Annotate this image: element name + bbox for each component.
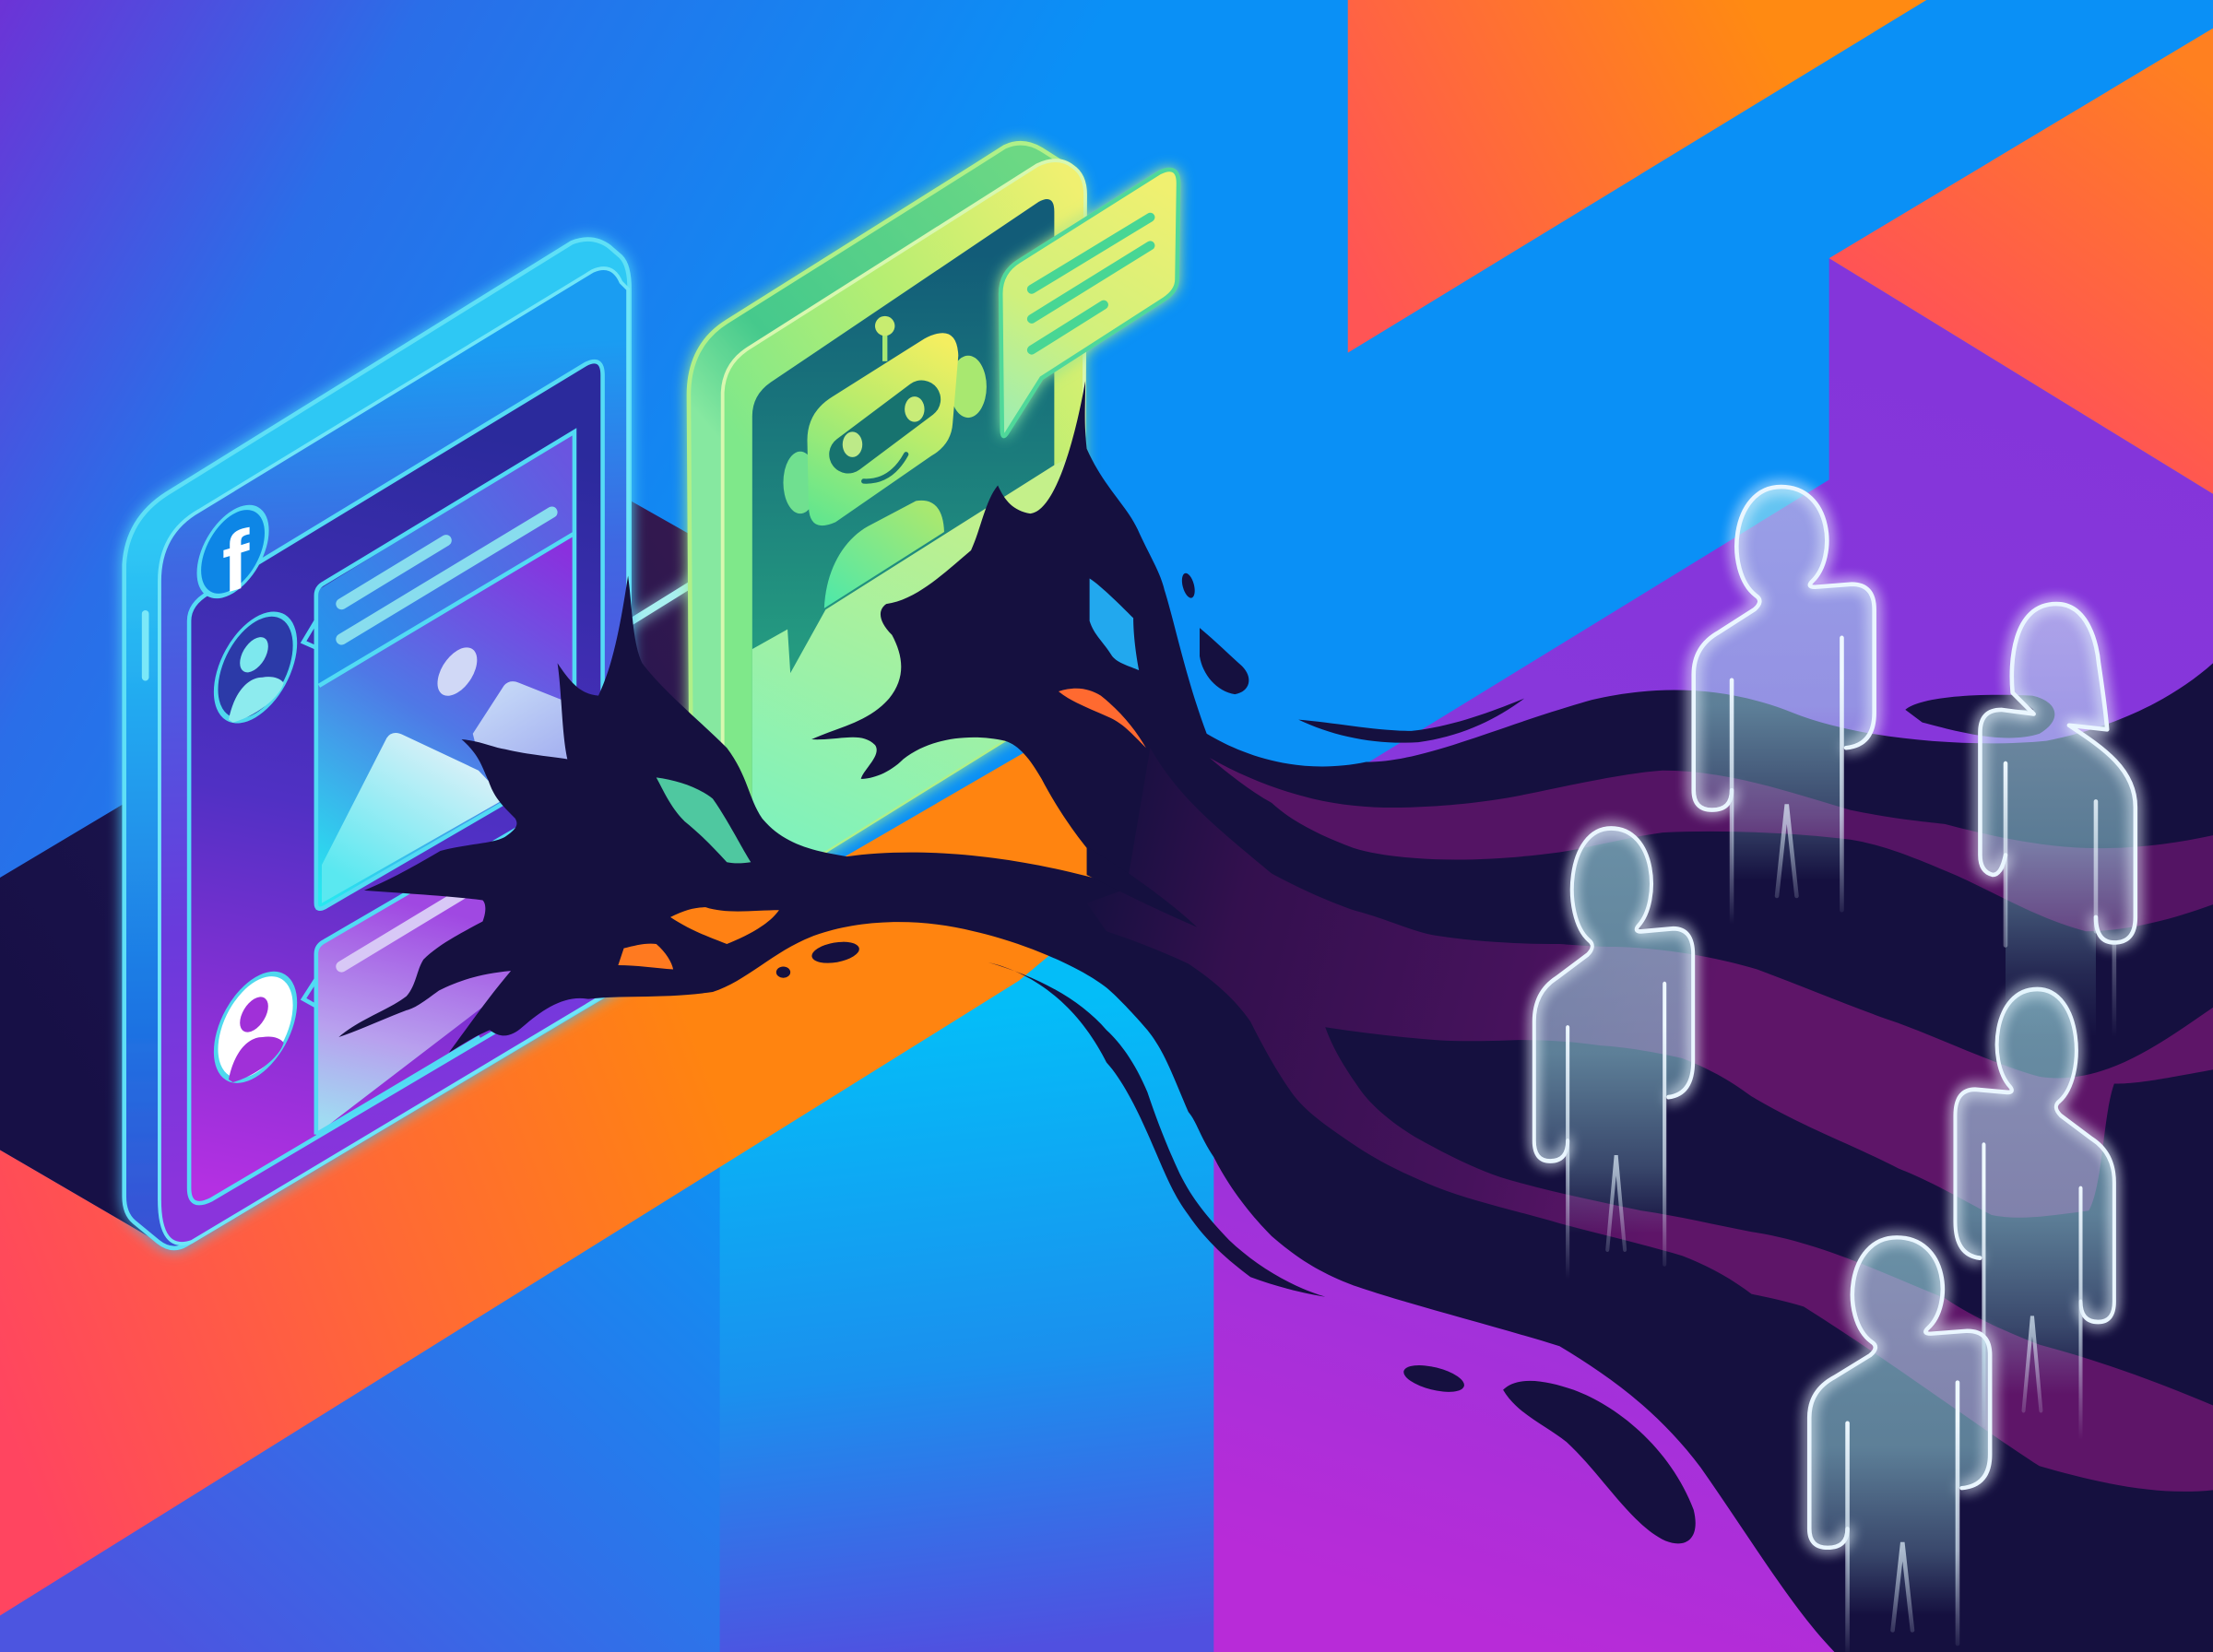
social icon: Facebook badge: f bbox=[222, 513, 250, 612]
chatbot screen light bbox=[752, 452, 1083, 858]
ink drip: small bbox=[1179, 572, 1197, 599]
robot eyes bbox=[843, 431, 862, 457]
ink spots on orange bbox=[776, 938, 861, 978]
side button bbox=[143, 614, 148, 678]
robot visor bbox=[848, 399, 921, 454]
ink ribbon: upper purple bbox=[1210, 758, 2213, 931]
robot ears bbox=[783, 452, 817, 513]
ink hole: cyan bbox=[1090, 579, 1139, 670]
image mountain: far bbox=[473, 681, 572, 762]
ink flood: main mass and river bbox=[338, 381, 2213, 1652]
ink hole: orange tongue bbox=[670, 907, 779, 944]
person: right lower figure bbox=[1955, 989, 2114, 1440]
dark isometric band behind phones bbox=[0, 501, 705, 1249]
person: left figure bbox=[1534, 828, 1693, 1279]
ink drip: large bbox=[1200, 628, 1249, 694]
ink drop: lower left oval bbox=[1401, 1360, 1467, 1397]
background: top orange parallelogram bbox=[1348, 0, 1926, 353]
background: purple right panel bbox=[1213, 258, 2213, 1652]
chatbot phone side bbox=[689, 143, 1083, 867]
chat bubble bbox=[1000, 170, 1178, 436]
social icon: Facebook badge bbox=[199, 492, 266, 612]
post image bbox=[316, 534, 574, 910]
background: lower-left blue panel bbox=[0, 987, 721, 1652]
ink drop: large curved bbox=[1503, 1381, 1696, 1543]
robot head bbox=[808, 333, 958, 525]
phone screen bbox=[189, 361, 603, 1203]
image sun bbox=[437, 639, 477, 704]
robot bbox=[783, 316, 987, 608]
background: right orange wedge bbox=[1829, 29, 2213, 494]
background: central cyan column bbox=[720, 903, 1215, 1652]
robot antenna bbox=[883, 327, 886, 361]
chatbot screen dark bbox=[752, 199, 1054, 846]
chatbot phone front bbox=[723, 160, 1085, 867]
ink hole: phone seen through bbox=[657, 777, 751, 863]
image mountain: near bbox=[322, 733, 505, 903]
ink hole: orange right bbox=[1059, 689, 1146, 748]
ink strand along river edge bbox=[988, 962, 1325, 1297]
bubble text lines bbox=[1032, 218, 1150, 350]
ink hole: small orange bbox=[618, 944, 673, 970]
avatar: top user bbox=[216, 596, 295, 738]
orange isometric band bbox=[0, 741, 1129, 1616]
phone front edge bbox=[160, 268, 628, 1244]
person: woman on the right bbox=[1980, 604, 2136, 1037]
robot smile bbox=[864, 454, 906, 481]
person: top figure bbox=[1694, 487, 1875, 925]
ink ribbon: forked middle and lower purple bbox=[1087, 748, 2213, 1492]
phone: AI chatbot bbox=[689, 143, 1085, 867]
robot body bbox=[824, 501, 944, 608]
connector beam between phones bbox=[628, 572, 710, 624]
post card: lower post bbox=[303, 797, 582, 1135]
post text lines bbox=[341, 513, 551, 639]
phone body bbox=[124, 240, 630, 1248]
post card: top post bbox=[303, 431, 574, 910]
ink wisp inside purple bbox=[1087, 846, 1197, 927]
avatar: lower user bbox=[216, 956, 295, 1099]
person: bottom figure bbox=[1809, 1237, 1990, 1652]
ink strand: upper wisp bbox=[1298, 699, 1524, 743]
ink spot behind woman bbox=[1905, 695, 2054, 738]
phone: social media app bbox=[124, 240, 630, 1248]
post header bbox=[316, 431, 574, 686]
